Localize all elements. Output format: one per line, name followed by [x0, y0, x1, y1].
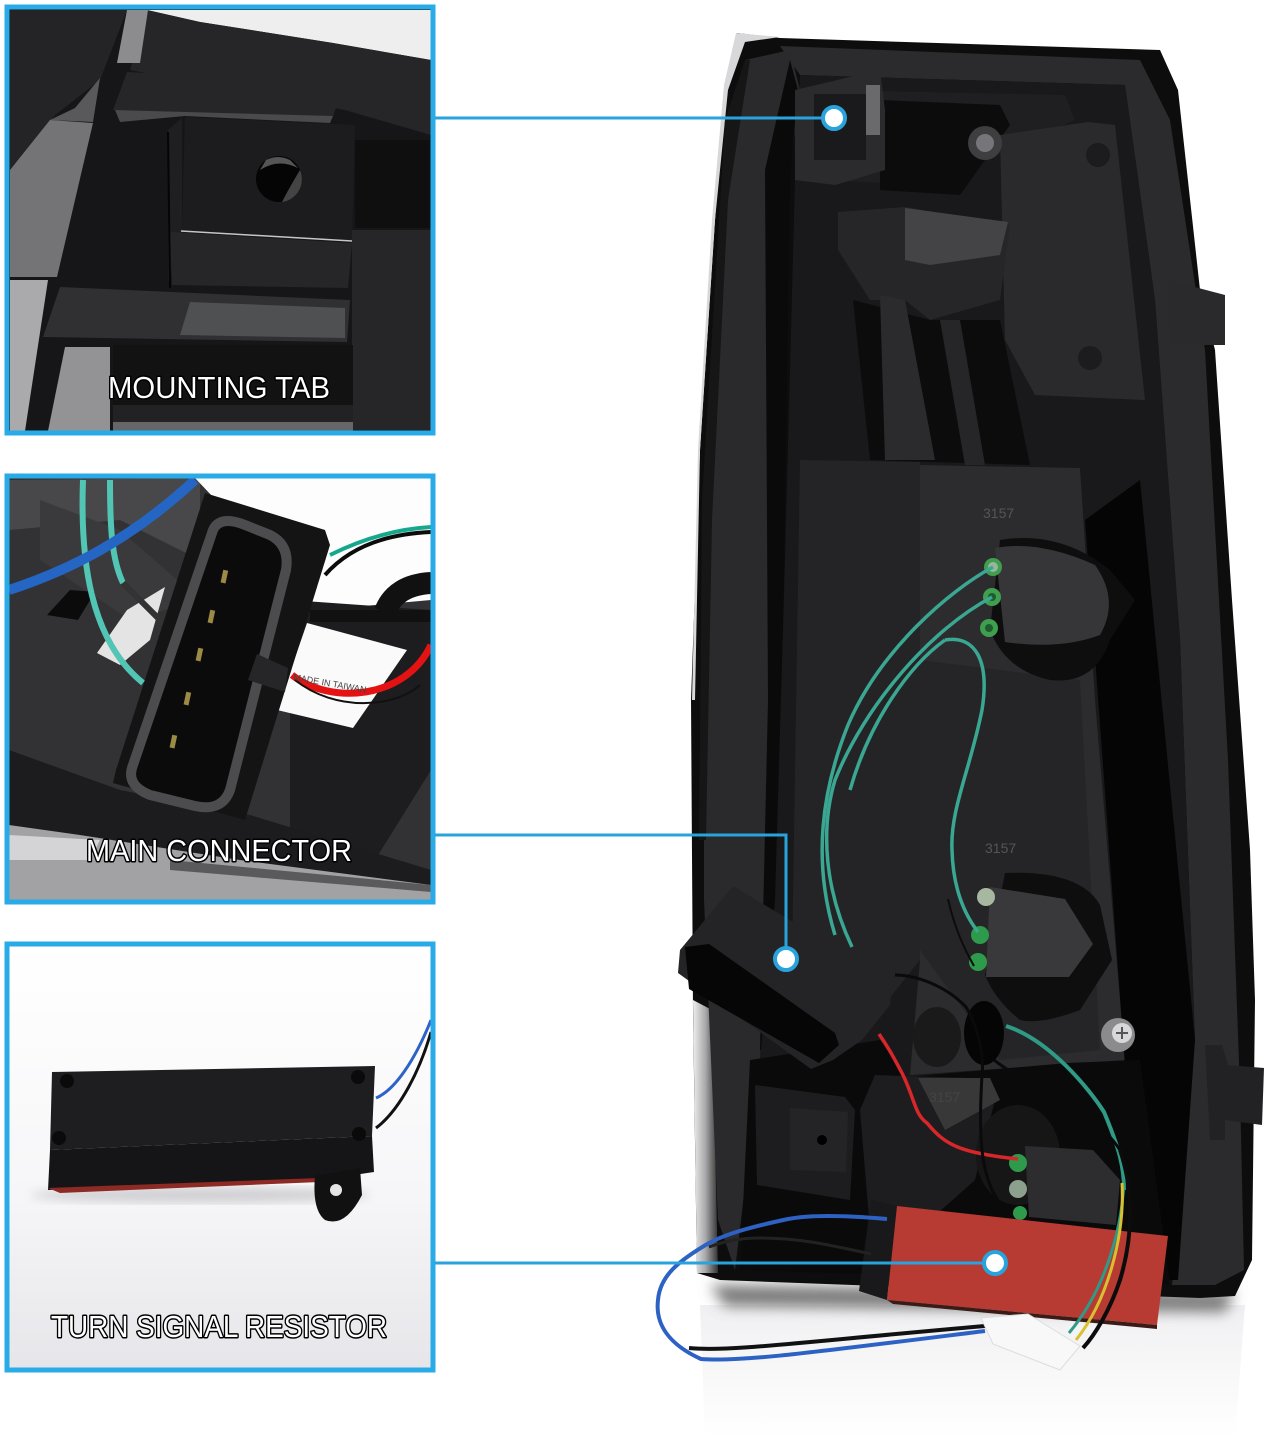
- icon: connector plug: [113, 493, 330, 820]
- socket text: 3157: [985, 840, 1016, 856]
- light socket recess: [838, 207, 1010, 320]
- wires: [376, 1020, 431, 1098]
- icon: resistor box: [48, 1066, 375, 1222]
- screw lower: [1101, 1018, 1135, 1052]
- resistor box on tail light: [859, 1200, 1168, 1329]
- wires: green: [83, 480, 143, 683]
- green wires: [822, 567, 993, 947]
- heading: main connector label: MAIN CONNECTOR: [86, 833, 352, 868]
- grommet: [913, 1001, 1004, 1067]
- panel: mounting tab: [7, 7, 433, 433]
- panel: main connector: [7, 476, 433, 902]
- socket text: [929, 505, 1016, 1105]
- socket text: 3157: [929, 1089, 960, 1105]
- panel: main connector: MADE IN TAIWAN: [293, 672, 367, 695]
- clip: right lower: [1205, 1045, 1264, 1140]
- callout line: mounting tab: [435, 107, 845, 129]
- callout line: main connector: [435, 835, 797, 970]
- lens edge: [692, 33, 780, 700]
- panel: turn signal resistor: [7, 944, 433, 1370]
- wire: blue: [9, 480, 195, 590]
- housing: [691, 33, 1255, 1298]
- wire bundle over box: [1069, 1150, 1130, 1348]
- floor reflection: [700, 1305, 1245, 1437]
- screw top: [968, 126, 1002, 160]
- clip: right upper: [1168, 280, 1225, 345]
- top mounting tab on tail light: [795, 70, 885, 185]
- lower dark panel: [792, 460, 920, 1010]
- socket text: 3157: [983, 505, 1014, 521]
- lower housing: [740, 1040, 1170, 1285]
- heading: turn signal resistor label: TURN SIGNAL RESISTOR: [51, 1309, 387, 1344]
- lower socket: [976, 1105, 1120, 1225]
- black wires: [895, 975, 1120, 1210]
- icon: tab hole: [256, 156, 302, 202]
- callout line: turn signal resistor: [435, 1252, 1006, 1274]
- middle socket: [969, 873, 1112, 1021]
- blue and black braided wire: [658, 1216, 985, 1360]
- red wire: [879, 1034, 1018, 1159]
- upper socket: [980, 538, 1135, 680]
- white plug: [981, 1314, 1080, 1370]
- inner tray: [740, 75, 1195, 1285]
- tail light assembly: [658, 33, 1264, 1437]
- connector plug on tail light: [678, 886, 892, 1069]
- heading: mounting tab label: MOUNTING TAB: [108, 370, 330, 405]
- lower mounting tab: [755, 1085, 855, 1200]
